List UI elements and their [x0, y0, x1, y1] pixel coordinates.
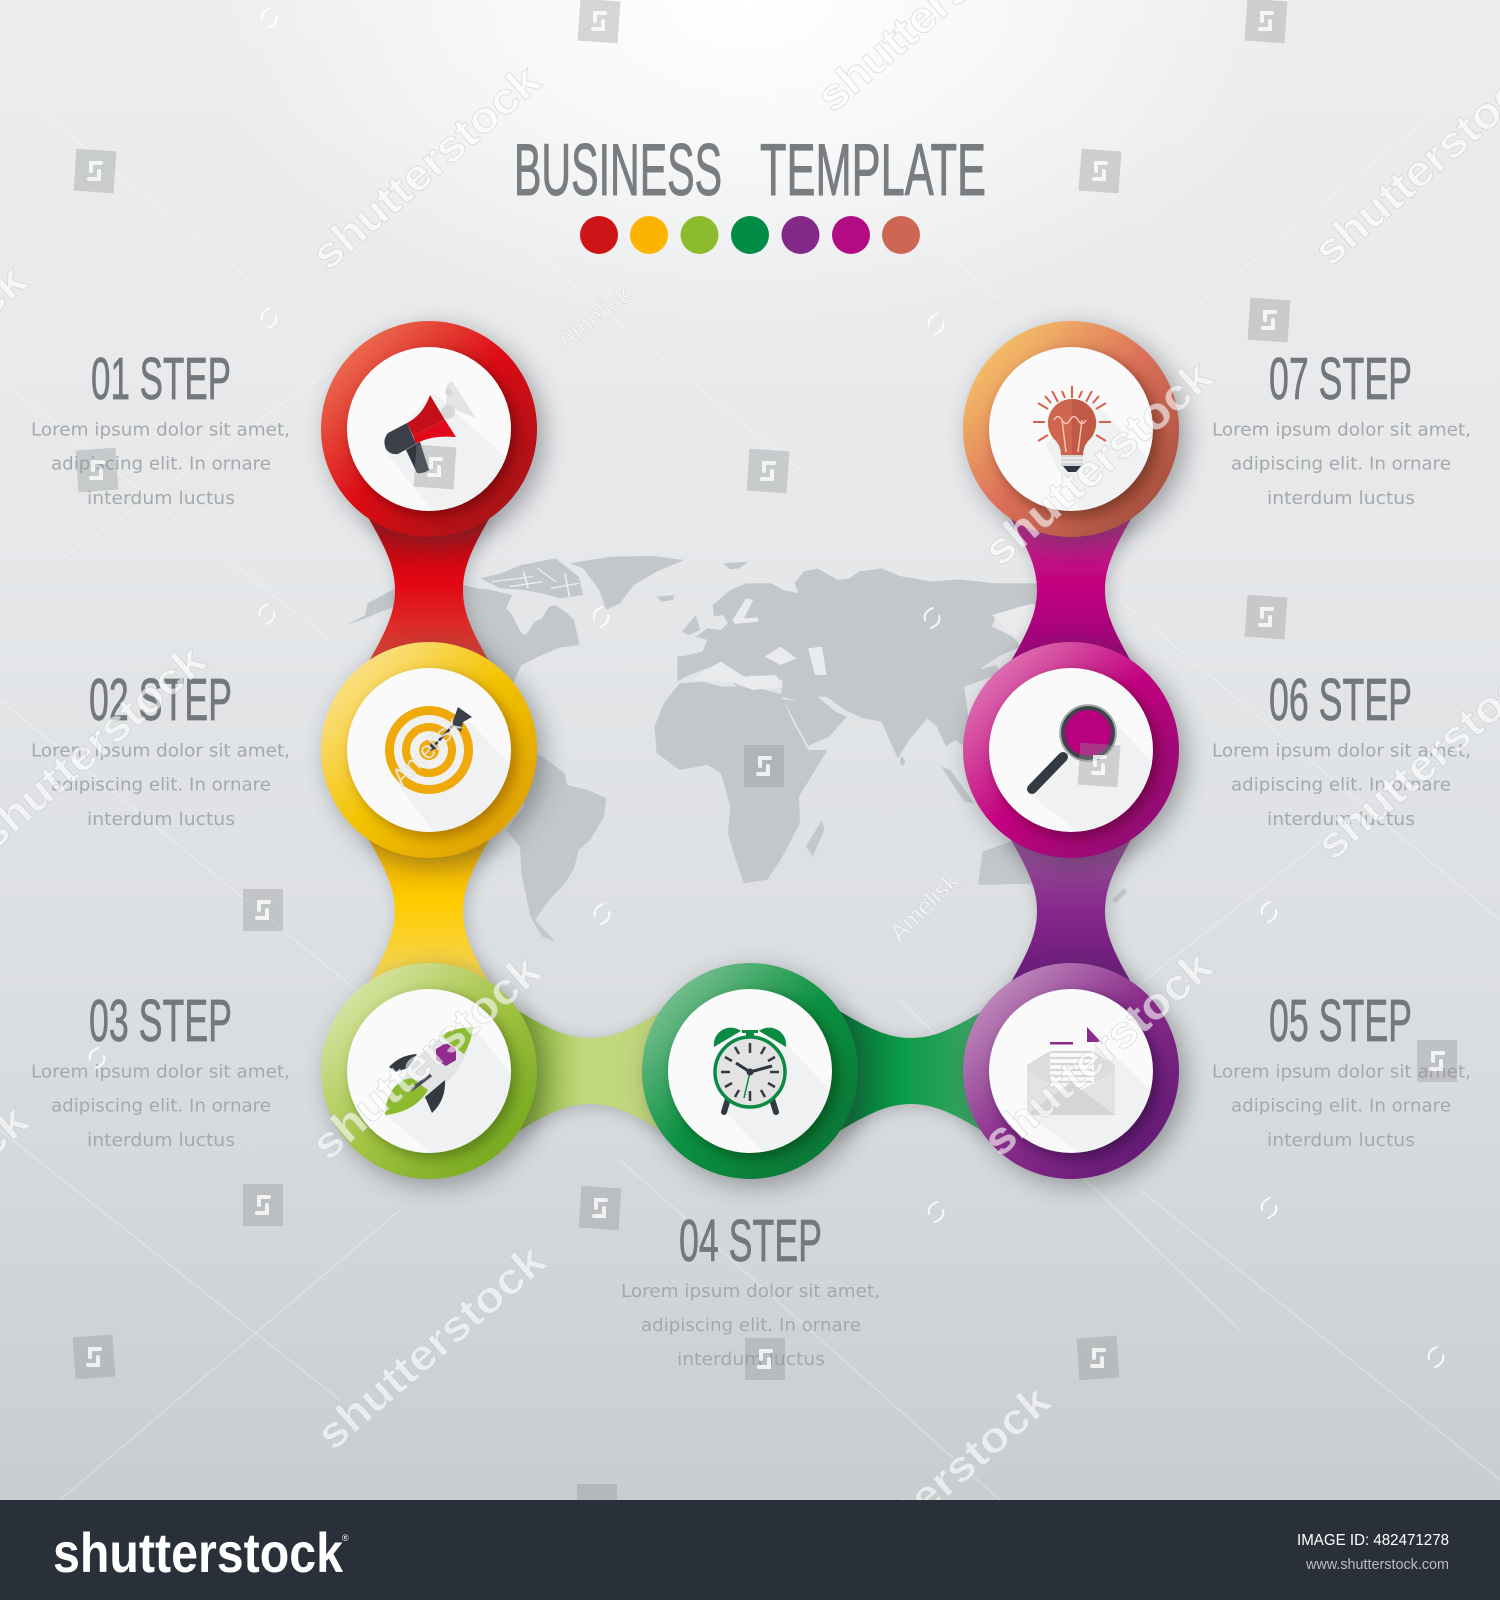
heading and text: 07 step: 07 STEP: [1269, 346, 1412, 412]
heading and text: 05 step: [1212, 988, 1471, 1151]
heading and text: 03 step: adipiscing elit. In ornare: [51, 1096, 271, 1116]
heading and text: 01 step: [31, 346, 290, 509]
stock watermark overlay: shutterstock: [302, 55, 550, 280]
connector: steps 4-5: [831, 1006, 991, 1136]
icon: rocket: [385, 1027, 473, 1115]
heading and text: 02 step: adipiscing elit. In ornare: [51, 774, 271, 796]
heading and text: 07 step: Lorem ipsum dolor sit amet,: [1212, 420, 1471, 440]
heading and text: 03 step: Lorem ipsum dolor sit amet,: [31, 1062, 290, 1082]
heading and text: 06 step: adipiscing elit. In ornare: [1231, 774, 1451, 796]
panel: step 7 disc: [963, 321, 1186, 544]
heading and text: 07 step: interdum luctus: [1267, 488, 1415, 509]
icon: megaphone: [384, 381, 476, 473]
connector shadows: [367, 513, 1139, 1139]
heading and text: 01 step: adipiscing elit. In ornare: [51, 454, 271, 474]
heading and text: 06 step: interdum luctus: [1267, 809, 1415, 830]
heading and text: 07 step: adipiscing elit. In ornare: [1231, 454, 1451, 474]
panel: step 1 disc: [321, 321, 544, 544]
heading and text: 06 step: Lorem ipsum dolor sit amet,: [1212, 740, 1471, 762]
heading and text: 07 step: [1212, 346, 1471, 509]
title: BUSINESS: [514, 130, 722, 211]
stock watermark overlay: Amelisk: [386, 711, 467, 791]
stock watermark overlay: shutterstock: [812, 1375, 1060, 1600]
panel: step 3 disc: [321, 963, 544, 1186]
heading and text: 02 step: 02 STEP: [89, 667, 232, 733]
heading and text: 04 step: [621, 1208, 880, 1370]
title: TEMPLATE: [760, 130, 986, 211]
connector: steps 5-6: [1006, 831, 1136, 991]
heading and text: 03 step: [31, 988, 290, 1151]
heading and text: 01 step: 01 STEP: [91, 346, 231, 412]
heading and text: 03 step: 03 STEP: [89, 988, 232, 1054]
heading and text: 04 step: interdum luctus: [677, 1349, 825, 1370]
icon: target: [385, 706, 473, 794]
website: www.shutterstock.com: [1305, 1556, 1449, 1573]
stock watermark overlay: shutterstock: [974, 351, 1222, 576]
heading and text: 05 step: interdum luctus: [1267, 1130, 1415, 1151]
world map: [347, 556, 1042, 942]
heading and text: 03 step: interdum luctus: [87, 1130, 235, 1151]
panel: step 5 disc: [963, 963, 1186, 1186]
stock watermark overlay: shutterstock: [307, 1235, 555, 1460]
heading and text: 02 step: interdum luctus: [87, 809, 235, 830]
heading and text: 06 step: [1212, 667, 1471, 830]
heading and text: 04 step: 04 STEP: [679, 1208, 822, 1274]
heading and text: 04 step: Lorem ipsum dolor sit amet,: [621, 1281, 880, 1302]
panel: step 6 disc: [963, 642, 1186, 865]
stock watermark overlay: shutterstock: [302, 945, 550, 1170]
small island: [1112, 888, 1127, 903]
heading and text: 01 step: interdum luctus: [87, 488, 235, 509]
connector: steps 3-4: [510, 1006, 670, 1136]
heading and text: 05 step: Lorem ipsum dolor sit amet,: [1212, 1062, 1471, 1082]
icon: alarm clock: [714, 1028, 786, 1112]
stock watermark overlay: Amelisk: [552, 280, 637, 355]
heading and text: 02 step: Lorem ipsum dolor sit amet,: [31, 740, 290, 762]
stock watermark overlay: shutterstock: [974, 941, 1222, 1166]
colour dots: [580, 216, 920, 254]
heading and text: 05 step: adipiscing elit. In ornare: [1231, 1096, 1451, 1116]
connector: steps 2-3: [364, 831, 494, 991]
heading and text: 04 step: adipiscing elit. In ornare: [641, 1315, 861, 1336]
panel: step 2 disc: [321, 642, 544, 865]
icon: magnifying glass: [1032, 705, 1116, 789]
icon: light bulb: [1033, 386, 1111, 472]
heading and text: 02 step: [31, 667, 290, 830]
image id: IMAGE ID: 482471278: [1297, 1532, 1449, 1549]
connector: steps 1-2: [364, 510, 494, 670]
heading and text: 01 step: Lorem ipsum dolor sit amet,: [31, 420, 290, 440]
heading and text: 05 step: 05 STEP: [1269, 988, 1412, 1054]
registered mark: ®: [342, 1533, 349, 1543]
logo: shutterstock: [53, 1521, 344, 1584]
connector: steps 6-7: [1006, 510, 1136, 670]
stock watermark overlay: Amelisk: [884, 867, 965, 947]
footer bar: [0, 1500, 1500, 1600]
panel: step 4 disc: [642, 963, 865, 1186]
icon: envelope: [1027, 1027, 1115, 1115]
heading and text: 06 step: 06 STEP: [1269, 667, 1412, 733]
